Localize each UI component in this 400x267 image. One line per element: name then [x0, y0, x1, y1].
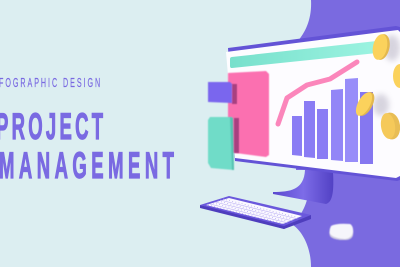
coin shadows — [373, 35, 400, 116]
teal floating block — [208, 117, 234, 170]
panel shadow: square — [232, 84, 237, 104]
coin: middle — [353, 89, 378, 119]
title: management: MANAGEMENT — [0, 146, 174, 187]
coin: right edge — [393, 64, 400, 88]
coin: top — [370, 33, 392, 61]
panel shadow: block — [234, 118, 239, 153]
coin: bottom — [379, 111, 400, 141]
bar chart — [292, 78, 373, 164]
teal header bar — [232, 43, 377, 66]
line chart — [278, 62, 357, 124]
keyboard — [200, 196, 311, 229]
mouse — [329, 224, 353, 240]
monitor — [226, 26, 400, 204]
pink panel — [228, 71, 269, 157]
monitor rim — [228, 26, 400, 181]
monitor stand — [273, 170, 333, 204]
purple floating square — [208, 82, 232, 103]
monitor screen — [226, 30, 400, 178]
purple blob background — [293, 0, 400, 267]
